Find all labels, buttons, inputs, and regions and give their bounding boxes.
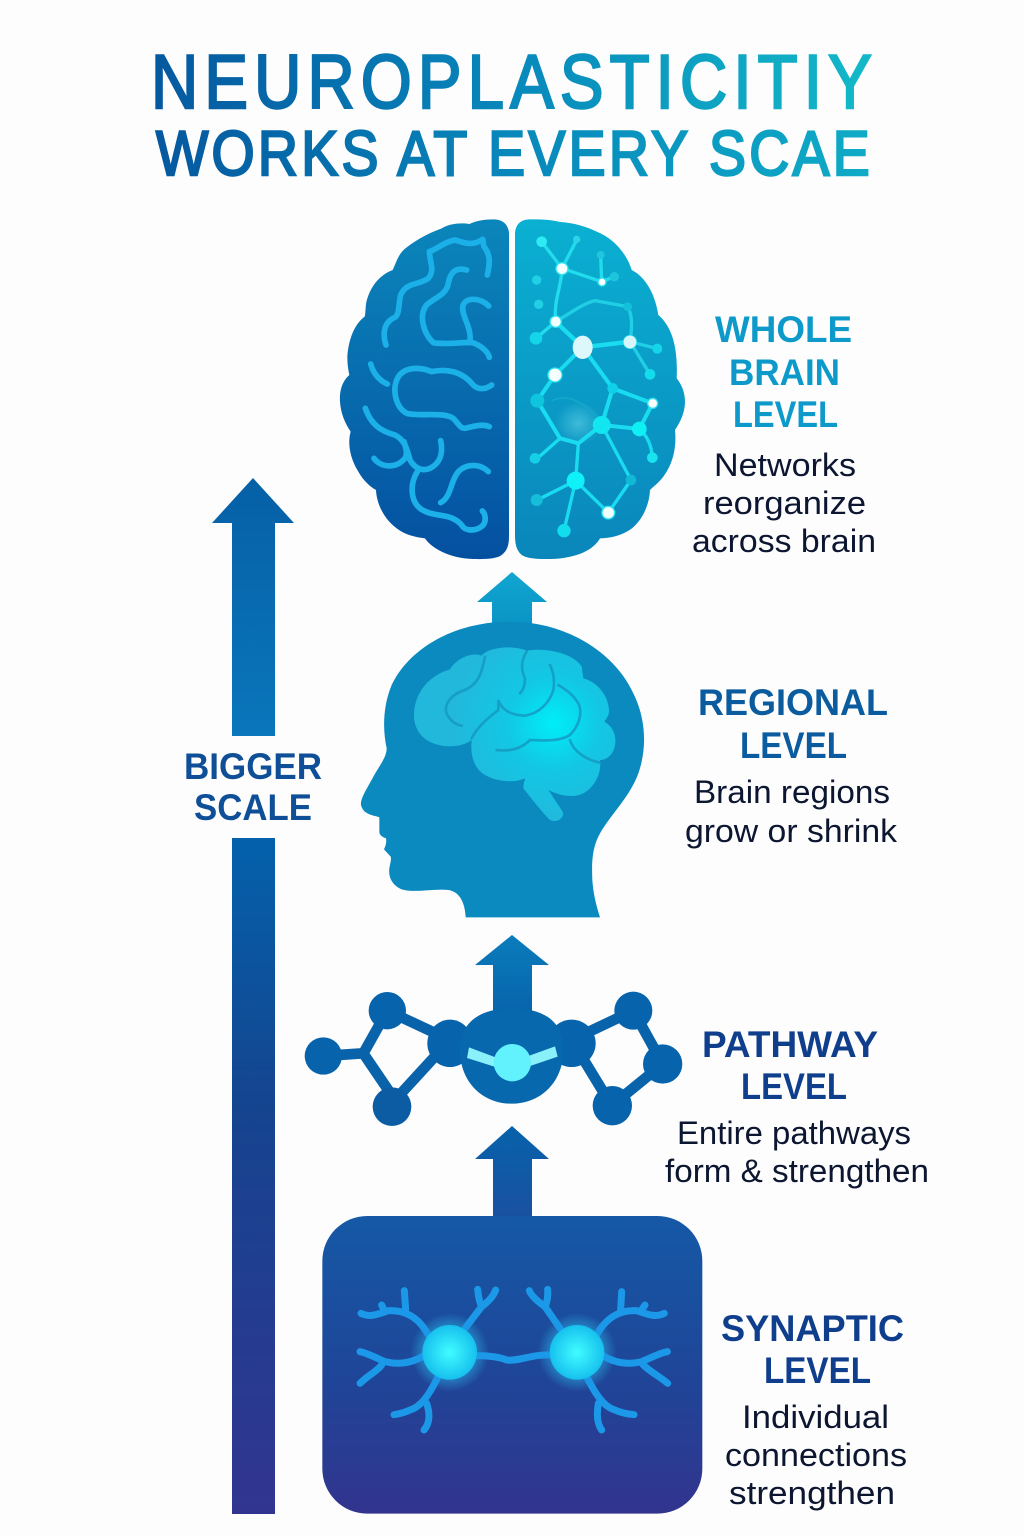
neuron bodies: [422, 1325, 477, 1380]
label: whole brain level: Networks: [714, 447, 856, 483]
label: synaptic level: connections: [725, 1437, 907, 1473]
icon: whole brain: [340, 219, 685, 559]
label: pathway level: Entire pathways: [677, 1115, 911, 1151]
left gyri lines: [365, 239, 492, 530]
arrow: pathway to regional: [475, 935, 549, 1015]
label: whole brain level: LEVEL: [733, 394, 838, 435]
label: regional level: grow or shrink: [685, 813, 898, 849]
pathway nodes: [305, 992, 682, 1126]
panel: synaptic box with neurons: [322, 1216, 702, 1514]
title: WORKS AT EVERY SCAE: [156, 118, 870, 189]
central highlight: [467, 1047, 498, 1067]
label: pathway level: PATHWAY: [702, 1024, 878, 1065]
head silhouette: [361, 622, 644, 917]
network glow: [555, 402, 602, 445]
label: regional level: LEVEL: [740, 725, 847, 766]
label: regional level: [685, 682, 898, 849]
label: pathway level: LEVEL: [741, 1066, 847, 1107]
label: bigger scale: BIGGER: [184, 746, 322, 787]
network links: [536, 240, 657, 531]
label: regional level: REGIONAL: [698, 682, 888, 723]
label: whole brain level: reorganize: [703, 485, 866, 521]
brain: [414, 647, 615, 821]
network nodes: [530, 236, 662, 537]
label: regional level: Brain regions: [694, 774, 890, 810]
brain folds: [446, 652, 600, 763]
label: whole brain level: BRAIN: [729, 352, 840, 393]
label: synaptic level: [721, 1308, 907, 1511]
arrow: synaptic to pathway: [475, 1126, 549, 1220]
icon: head with brain: [361, 622, 644, 917]
label: bigger scale: SCALE: [194, 787, 312, 828]
dendrites: [360, 1289, 668, 1430]
label: whole brain level: across brain: [692, 523, 876, 559]
icon: pathway network: [305, 992, 682, 1126]
label: whole brain level: [692, 309, 876, 559]
label: pathway level: [665, 1024, 929, 1189]
left hemisphere: [340, 219, 509, 559]
right hemisphere: [515, 219, 685, 559]
label: pathway level: form & strengthen: [665, 1153, 929, 1189]
label: bigger scale: [184, 746, 322, 828]
label: synaptic level: SYNAPTIC: [721, 1308, 904, 1349]
title: [151, 40, 872, 189]
neuron glow: [410, 1313, 489, 1392]
pathway links: [323, 1011, 663, 1106]
arrow: regional to whole brain: [477, 572, 547, 626]
label: synaptic level: LEVEL: [764, 1350, 871, 1391]
label: whole brain level: WHOLE: [715, 309, 852, 350]
label: synaptic level: strengthen: [729, 1475, 895, 1511]
title: NEUROPLASTICITIY: [151, 40, 872, 125]
label: synaptic level: Individual: [742, 1399, 889, 1435]
central hub: [460, 1008, 563, 1104]
arrow: bigger scale vertical arrow: [212, 478, 294, 1514]
